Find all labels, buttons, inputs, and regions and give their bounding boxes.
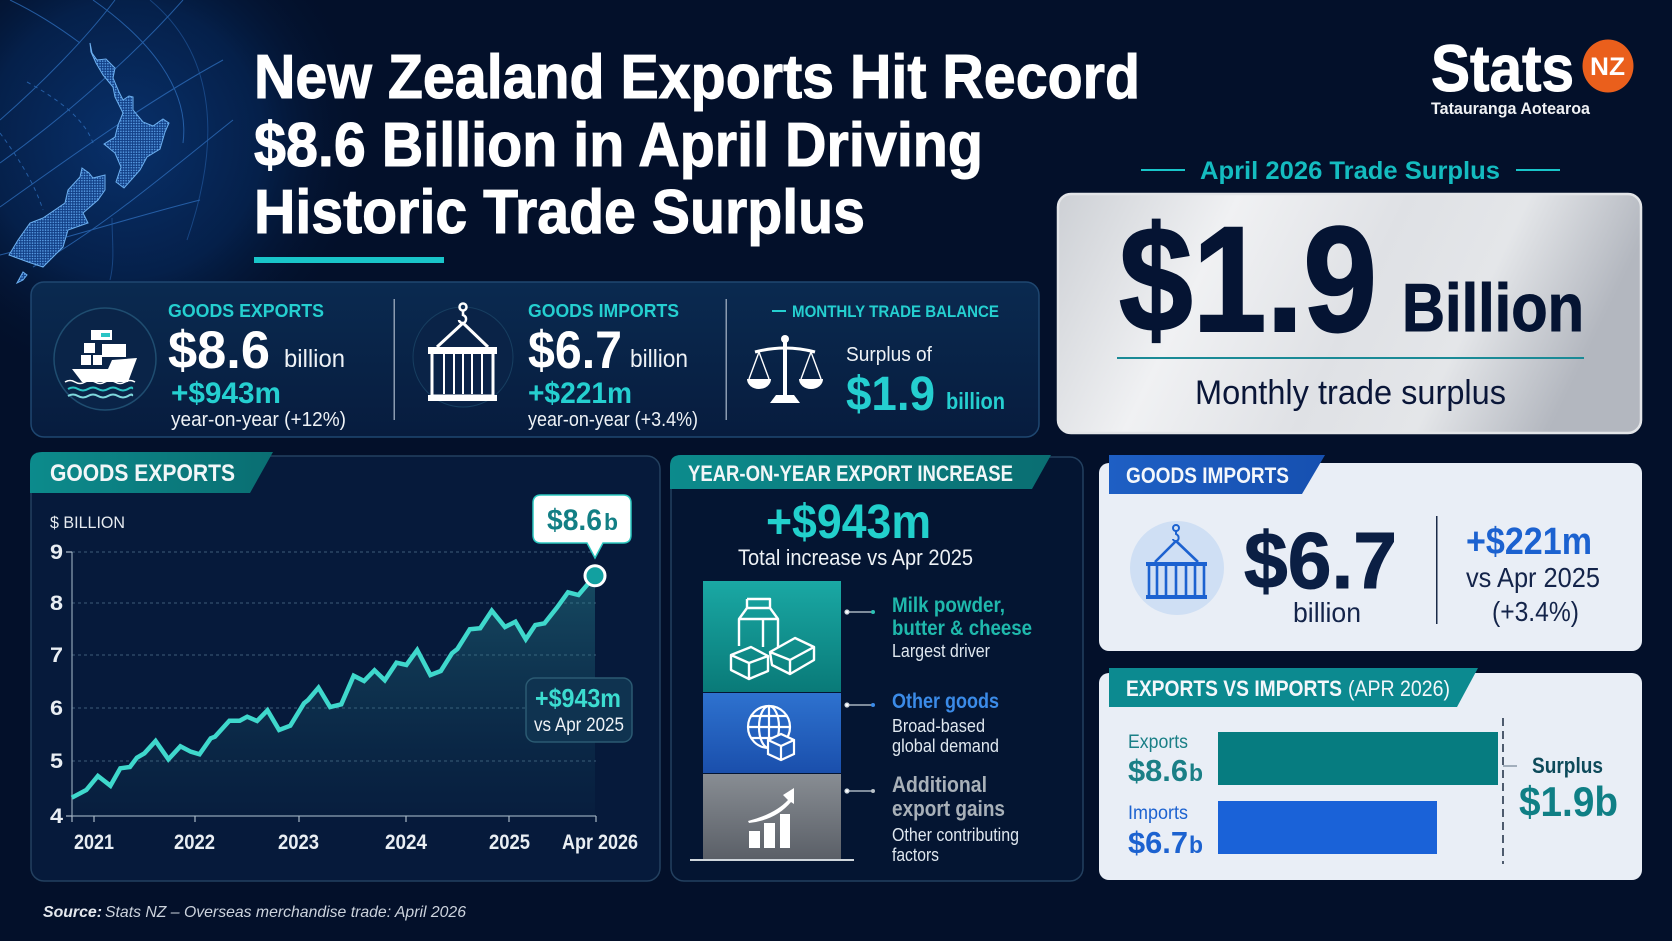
panel: $1.9 billion surplus: Billion [1402, 270, 1584, 346]
panel: exports vs imports [1099, 668, 1642, 880]
logo: Stats NZ: NZ [1590, 53, 1625, 81]
icon: shipping container [413, 304, 513, 407]
label: imports [1128, 803, 1203, 860]
figure: +$221m vs Apr 2025: (+3.4%) [1492, 596, 1579, 627]
text: goods imports [528, 300, 698, 431]
text: goods exports: $8.6 [168, 321, 270, 380]
text: monthly trade balance [772, 302, 1005, 421]
line chart: 7 [50, 644, 63, 667]
panel: $1.9 billion surplus: Monthly trade surplus [1195, 374, 1506, 412]
line chart: 2023 [278, 831, 319, 854]
heading: April 2026 trade surplus: April 2026 Trade Surplus [1200, 157, 1500, 185]
logo: Stats NZ: Stats [1431, 31, 1574, 105]
figure: +$221m vs Apr 2025 [1466, 521, 1600, 627]
callout: +$943m vs Apr 2025: +$943m [535, 683, 621, 713]
title underline [254, 257, 444, 263]
line chart: 2022 [174, 831, 215, 854]
text: goods exports: GOODS EXPORTS [168, 300, 324, 321]
label: exports: Exports [1128, 732, 1188, 753]
label: other goods: global demand [892, 736, 999, 756]
line chart: 2021 [74, 831, 114, 854]
callout: +$943m vs Apr 2025: vs Apr 2025 [534, 715, 624, 736]
globe and map of New Zealand [0, 0, 233, 283]
callout: $8.6b: $8.6 [547, 504, 602, 537]
title: $8.6 Billion in April Driving [254, 111, 983, 180]
icon: cargo ship [54, 308, 156, 410]
text: monthly trade balance: Surplus of [846, 344, 932, 366]
tab: goods exports: GOODS EXPORTS [50, 460, 235, 487]
panel: $1.9 billion surplus: $1.9 [1119, 195, 1377, 363]
label: imports: $6.7 [1128, 825, 1188, 860]
panel: key figures [31, 282, 1039, 437]
label: surplus $1.9b: Surplus [1532, 753, 1603, 778]
bar: exports [1218, 732, 1498, 785]
stacked bar: milk powder, butter and cheese [703, 581, 841, 692]
figure: $6.7 billion: $6.7 [1244, 516, 1397, 605]
label: other goods: Broad-based [892, 716, 985, 736]
label: additional export gains: export gains [892, 796, 1005, 821]
text: goods imports: +$221m [528, 377, 632, 410]
text: goods imports: billion [630, 345, 688, 373]
label: additional export gains [892, 772, 1019, 865]
tab: goods imports: GOODS IMPORTS [1126, 463, 1289, 488]
bar: imports [1218, 801, 1437, 854]
callout: +$943m vs Apr 2025 [526, 678, 632, 742]
title [254, 43, 1140, 247]
panel: goods imports [1099, 455, 1642, 651]
panel: $1.9 billion surplus [1058, 194, 1641, 433]
text: monthly trade balance: $1.9 [846, 368, 935, 421]
title: New Zealand Exports Hit Record [254, 43, 1140, 112]
line chart: 2024 [385, 831, 427, 854]
line chart [50, 541, 638, 854]
line chart: 5 [50, 750, 63, 773]
stacked bar: additional export gains [690, 774, 854, 861]
line chart: 9 [50, 541, 63, 564]
label: milk powder, butter and cheese: butter & cheese [892, 617, 1032, 640]
tab: exports vs imports: (APR 2026) [1348, 676, 1450, 701]
logo: Stats NZ: Tatauranga Aotearoa [1431, 99, 1591, 118]
text: goods exports: +$943m [171, 377, 281, 410]
text: goods exports [168, 300, 346, 431]
label: milk powder, butter and cheese: Milk powder, [892, 594, 1005, 617]
tab: year-on-year export increase [670, 455, 1051, 489]
label: imports: Imports [1128, 803, 1188, 824]
icon: balance scales [747, 335, 823, 403]
label: surplus $1.9b [1519, 753, 1618, 825]
line chart: 8 [50, 592, 63, 615]
label: exports [1128, 732, 1203, 788]
label: additional export gains: factors [892, 845, 939, 865]
text: monthly trade balance: MONTHLY TRADE BALANCE [792, 302, 999, 321]
tab: goods exports [30, 452, 273, 493]
source: Stats NZ – Overseas merchandise trade: April 2026 [105, 904, 466, 921]
figure: $6.7 billion: billion [1293, 597, 1361, 628]
callout: $8.6b: b [604, 509, 618, 535]
total increase figure: Total increase vs Apr 2025 [738, 545, 973, 570]
tab: year-on-year export increase: YEAR-ON-YEAR EXPORT INCREASE [688, 461, 1013, 486]
figure: +$221m vs Apr 2025: vs Apr 2025 [1466, 562, 1600, 593]
line chart: Apr 2026 [562, 831, 638, 854]
line chart: 2025 [489, 831, 530, 854]
background glow [0, 0, 400, 400]
text: goods imports: $6.7 [528, 321, 622, 380]
title: Historic Trade Surplus [254, 178, 865, 247]
label: imports: b [1189, 832, 1203, 859]
text: goods imports: GOODS IMPORTS [528, 300, 679, 321]
tab: goods imports [1109, 455, 1325, 494]
text: monthly trade balance: billion [946, 388, 1005, 414]
line chart: 4 [50, 805, 63, 828]
logo: Stats NZ [1431, 31, 1634, 118]
total increase figure: +$943m [766, 496, 931, 549]
figure: +$221m vs Apr 2025: +$221m [1466, 521, 1592, 563]
panel: goods exports chart [30, 452, 660, 881]
callout: $8.6b [533, 495, 631, 558]
label: other goods [892, 690, 999, 756]
icon: container [1130, 521, 1224, 615]
label: surplus $1.9b: $1.9b [1519, 778, 1618, 825]
text: goods imports: year-on-year (+3.4%) [528, 409, 698, 431]
label: additional export gains: Additional [892, 772, 987, 797]
label: exports: $8.6 [1128, 753, 1188, 788]
label: exports: b [1189, 760, 1203, 787]
label: milk powder, butter and cheese: Largest driver [892, 641, 990, 661]
stacked bar: other goods [703, 693, 841, 773]
tab: exports vs imports: EXPORTS VS IMPORTS [1126, 676, 1342, 701]
tab: exports vs imports [1109, 668, 1478, 707]
text: goods exports: year-on-year (+12%) [171, 409, 346, 431]
label: additional export gains: Other contributing [892, 825, 1019, 845]
label: other goods: Other goods [892, 690, 999, 713]
line chart: 6 [50, 697, 63, 720]
connectors [845, 610, 875, 793]
text: goods exports: billion [284, 345, 345, 373]
source: Source: [43, 904, 102, 921]
y axis unit: $ BILLION [50, 513, 125, 532]
panel: year-on-year export increase [670, 455, 1083, 881]
total increase figure [738, 496, 973, 570]
label: milk powder, butter and cheese [892, 594, 1032, 661]
